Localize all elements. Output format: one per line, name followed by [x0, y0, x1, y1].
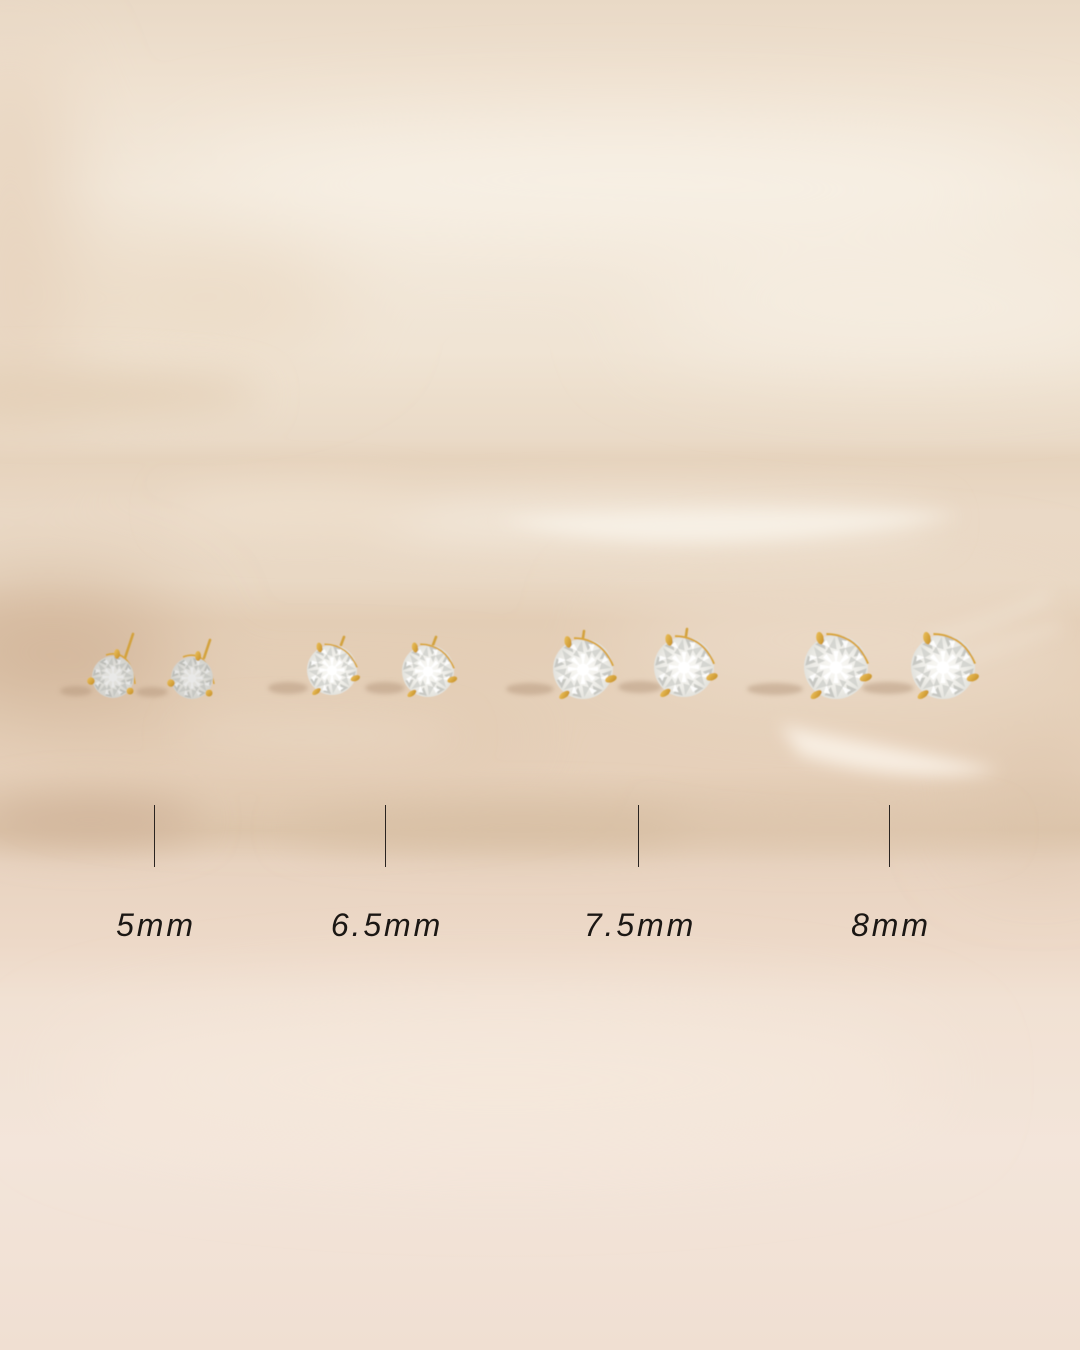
- size marker line: 8mm: [889, 805, 890, 867]
- size marker line: 5mm: [154, 805, 155, 867]
- 8mm pair: [804, 631, 980, 701]
- size label: 5mm: 5mm: [116, 907, 196, 943]
- 7.5mm pair: [553, 629, 719, 701]
- size label: 7.5mm: 7.5mm: [584, 907, 696, 943]
- size label: 8mm: 8mm: [851, 907, 931, 943]
- 5mm pair: [87, 634, 214, 699]
- size label: 6.5mm: 6.5mm: [331, 907, 443, 943]
- shadows: [60, 681, 914, 697]
- 6.5mm pair: [307, 637, 458, 698]
- size marker line: 6.5mm: [385, 805, 386, 867]
- size marker line: 7.5mm: [638, 805, 639, 867]
